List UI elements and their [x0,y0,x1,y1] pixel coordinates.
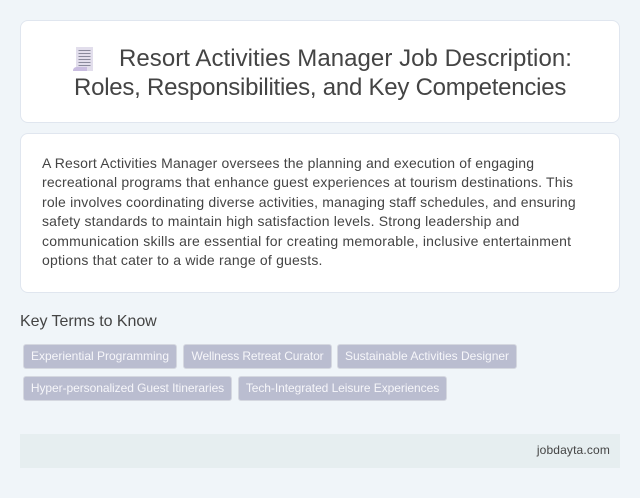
tag [23,376,232,401]
tag: Hyper-personalized Guest Itineraries [31,381,224,395]
description text: role involves coordinating diverse activities, managing staff schedules, and ensuring [42,194,576,210]
title line 2: Roles, Responsibilities, and Key Competencies [74,74,566,101]
description text: A Resort Activities Manager oversees the planning and execution of engaging [42,155,534,171]
footer bar [20,434,620,468]
tag [337,344,517,369]
description text: safety standards to maintain high satisfaction levels. Strong leadership and [42,213,520,229]
tag [238,376,447,401]
tag [23,344,177,369]
tag: Experiential Programming [31,349,169,363]
panel: description card [20,133,620,293]
footer source: jobdayta.com [537,443,610,457]
tag group [23,344,517,401]
icon: document scroll [73,47,93,71]
tag: Sustainable Activities Designer [345,349,509,363]
title line 1: Resort Activities Manager Job Description: [119,45,572,72]
tag [183,344,332,369]
description text: communication skills are essential for creating memorable, inclusive entertainment [42,233,571,249]
description text [42,155,576,268]
tag: Wellness Retreat Curator [191,349,324,363]
tag: Tech-Integrated Leisure Experiences [246,381,439,395]
panel: title card [20,20,620,123]
description text: recreational programs that enhance guest experiences at tourism destinations. This [42,174,573,190]
description text: options that cater to a wide range of guests. [42,252,323,268]
heading: key terms: Key Terms to Know [20,313,157,330]
